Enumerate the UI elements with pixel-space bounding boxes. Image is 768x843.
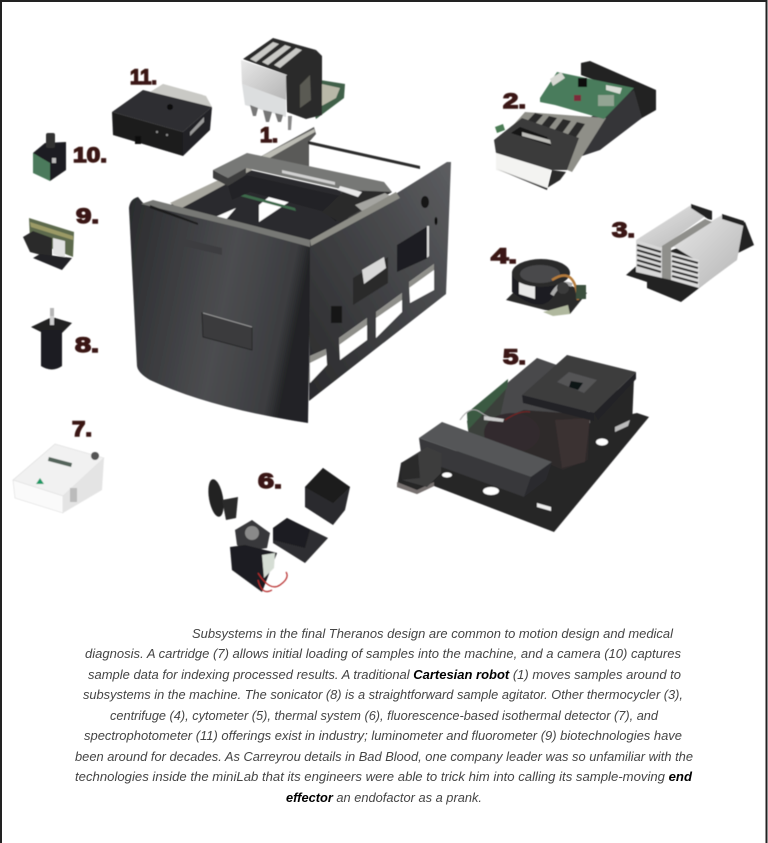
component 3: thermocycler heat sink xyxy=(626,204,754,302)
number 10: 10. xyxy=(73,144,107,167)
front handle recess xyxy=(202,313,252,350)
cartesian gantry xyxy=(213,153,392,222)
number 9: 9. xyxy=(76,205,99,228)
caption paragraph: technologies inside the miniLab that its engineers were able to trick him into calling its sample-moving end xyxy=(75,770,692,784)
component 4: centrifuge xyxy=(506,259,587,316)
stage support xyxy=(590,378,634,445)
component 1: cartesian robot pipettor xyxy=(241,38,345,130)
cartridge slot xyxy=(494,118,579,170)
component 7: cartridge box xyxy=(13,444,104,513)
caption paragraph: subsystems in the machine. The sonicator (8) is a straightforward sample agitator. Other thermocycler (3), xyxy=(83,688,683,702)
caption paragraph: sample data for indexing processed results. A traditional Cartesian robot (1) moves samples around to xyxy=(88,668,681,682)
side panel xyxy=(309,162,451,401)
number 6: 6. xyxy=(258,470,282,493)
caption paragraph: diagnosis. A cartridge (7) allows initial loading of samples into the machine, and a camera (10) captures xyxy=(85,647,681,661)
component 10: camera xyxy=(33,133,66,181)
interior xyxy=(170,170,405,250)
side block xyxy=(401,447,441,487)
optical drum xyxy=(498,410,590,470)
component 8: sonicator xyxy=(31,308,72,370)
number 1: 1. xyxy=(260,124,278,147)
number 5: 5. xyxy=(503,346,526,369)
front panel xyxy=(129,197,311,423)
wiring board xyxy=(467,379,508,430)
mount plate xyxy=(273,518,328,563)
caption paragraph: centrifuge (4), cytometer (5), thermal system (6), fluorescence-based isothermal detector (7), and xyxy=(110,709,659,723)
component 11: spectrophotometer xyxy=(112,84,212,156)
cube housing xyxy=(305,468,350,525)
component 9: luminometer and fluorometer xyxy=(23,218,74,270)
main chassis xyxy=(129,127,451,423)
left rail xyxy=(170,166,252,209)
number 3: 3. xyxy=(612,219,635,242)
back pillar and rod xyxy=(258,127,420,170)
component 5: cytometer xyxy=(397,355,649,532)
caption paragraph: effector an endofactor as a prank. xyxy=(286,791,482,805)
caption paragraph xyxy=(75,627,693,805)
number 11: 11. xyxy=(130,66,157,89)
rear housing xyxy=(487,358,590,440)
component 2: cartridge handling module xyxy=(494,61,656,190)
component 6: thermal system xyxy=(206,468,350,592)
caption paragraph: spectrophotometer (11) offerings exist in industry; luminometer and fluorometer (9) biotechnologies have xyxy=(84,729,682,743)
caption paragraph: been around for decades. As Carreyrou details in Bad Blood, one company leader was so unfamiliar with the xyxy=(75,750,693,764)
number 7: 7. xyxy=(72,418,92,441)
number 2: 2. xyxy=(503,90,526,113)
number 8: 8. xyxy=(75,334,99,357)
circuit board xyxy=(540,72,634,119)
caption paragraph: Subsystems in the final Theranos design are common to motion design and medical xyxy=(192,627,674,641)
logo xyxy=(180,238,222,255)
number 4: 4. xyxy=(491,245,517,268)
base holes xyxy=(483,487,499,495)
stage plate xyxy=(522,355,636,413)
base plate xyxy=(397,413,649,532)
front housing xyxy=(419,422,552,477)
fan shutter xyxy=(206,478,238,520)
peltier assembly xyxy=(235,520,270,552)
